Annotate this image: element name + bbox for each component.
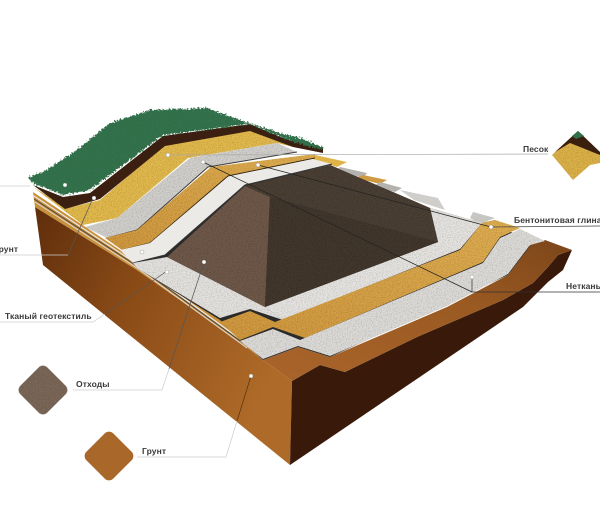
right white band [265,208,482,320]
lower grey layer [240,229,545,359]
thumbnail: sand [552,131,600,180]
striped geotextile edge [33,192,263,360]
label: waste: Отходы [76,379,110,389]
label: bentonite clay: Бентонитовая глина [514,215,600,225]
label: soil: Грунт [142,446,166,456]
waste mound [167,165,438,307]
thumbnail: waste [16,363,70,417]
dark base under the layers [133,165,530,360]
sand layer [33,130,347,225]
label: woven geotextile: Тканый геотекстиль [5,311,92,321]
lower orange band [220,220,520,340]
upper white band [120,159,332,263]
leader lines [0,154,600,457]
marker dots [63,153,493,378]
upper orange band [105,154,315,250]
upper grey band [85,143,297,238]
white geotextile under the mound [133,257,283,320]
soil and grass on top [28,108,323,209]
soil block [35,207,572,465]
back layers on the right [336,167,495,224]
thumbnail: soil [82,429,136,483]
label: sand: Песок [523,144,549,154]
